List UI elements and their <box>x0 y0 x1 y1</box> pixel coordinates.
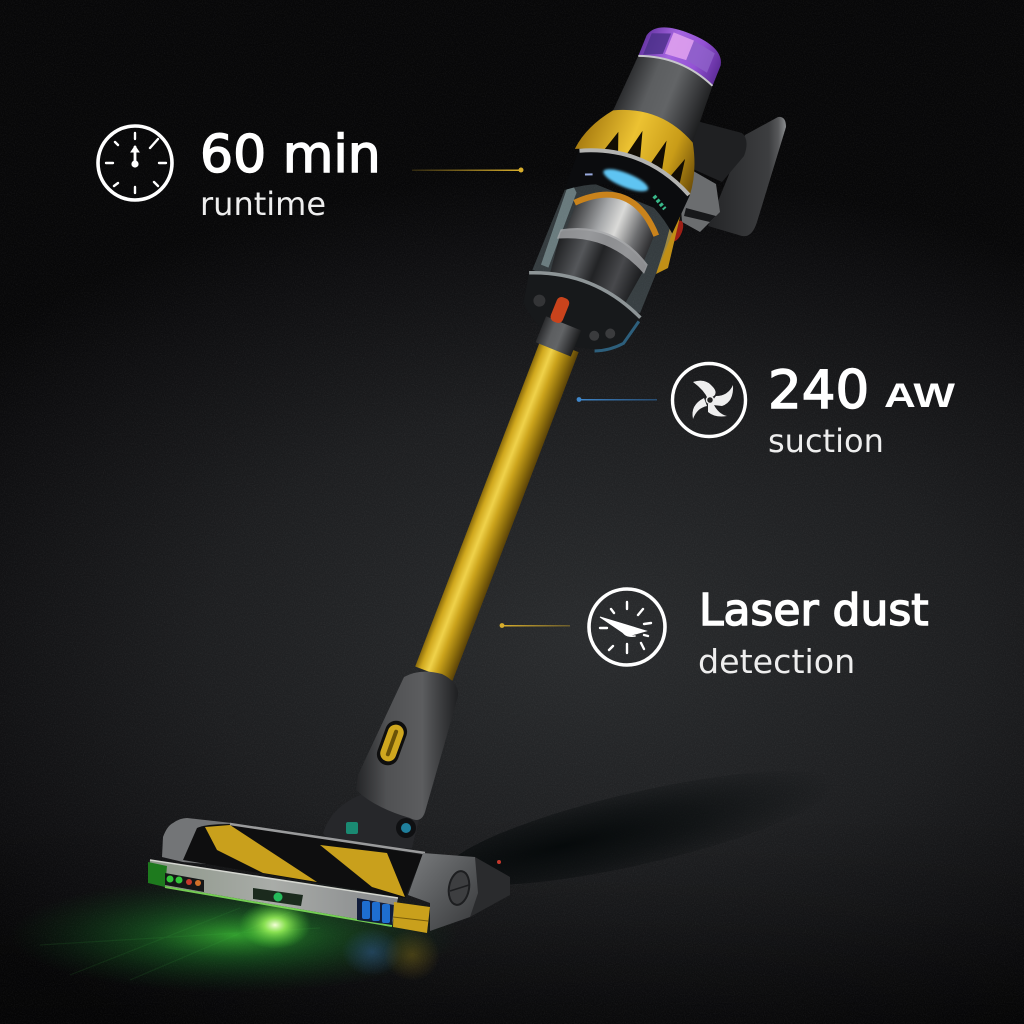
left gray cap <box>162 818 280 870</box>
callout: suction <box>577 360 956 460</box>
battery and handle <box>656 117 786 274</box>
base ring <box>510 261 645 366</box>
collar <box>536 316 581 356</box>
right gray cap <box>408 853 478 931</box>
leader line <box>500 623 570 628</box>
label: runtime <box>200 185 326 223</box>
blue buttons <box>357 898 394 925</box>
icon: gauge <box>589 589 665 665</box>
front band <box>148 860 398 925</box>
orange ring <box>575 181 665 236</box>
yellow stripes <box>205 825 317 882</box>
icon: fan <box>672 364 746 436</box>
dark inner cylinder <box>544 219 651 309</box>
clear dust bin <box>532 174 679 313</box>
red trigger <box>668 219 686 243</box>
callout: runtime <box>98 125 524 223</box>
gold side strip <box>656 200 684 274</box>
unit: AW <box>884 377 956 415</box>
leader line <box>577 397 657 402</box>
leader line <box>412 168 524 172</box>
green floor glow <box>10 877 460 993</box>
gray motor cylinder <box>612 48 718 144</box>
black roller <box>183 824 423 898</box>
value: 240 <box>768 360 869 421</box>
wand <box>415 338 579 681</box>
indicator panel <box>165 873 204 892</box>
value: Laser dust <box>699 585 929 636</box>
label: suction <box>768 422 884 460</box>
display band <box>563 136 695 234</box>
icon: clock <box>98 126 172 200</box>
value: 60 min <box>200 125 381 185</box>
center window <box>253 888 303 906</box>
neck sleeve <box>346 672 458 838</box>
handle <box>684 120 747 182</box>
gold cone <box>575 92 713 195</box>
gold slider pill <box>374 718 410 768</box>
neck joint dome <box>323 793 420 848</box>
rear housing <box>470 857 510 917</box>
floor head <box>148 818 510 933</box>
purple cap <box>638 19 727 86</box>
callout: laser dust detection <box>500 585 929 681</box>
main body <box>502 10 746 375</box>
silver cylinder <box>562 183 663 272</box>
red release button <box>549 296 571 324</box>
label: detection <box>698 642 855 681</box>
yellow end cap <box>393 902 430 933</box>
wheel <box>446 870 472 906</box>
battery <box>708 117 786 236</box>
floor shadow <box>437 748 843 908</box>
lower grip <box>680 168 720 232</box>
joint lights <box>346 822 358 834</box>
